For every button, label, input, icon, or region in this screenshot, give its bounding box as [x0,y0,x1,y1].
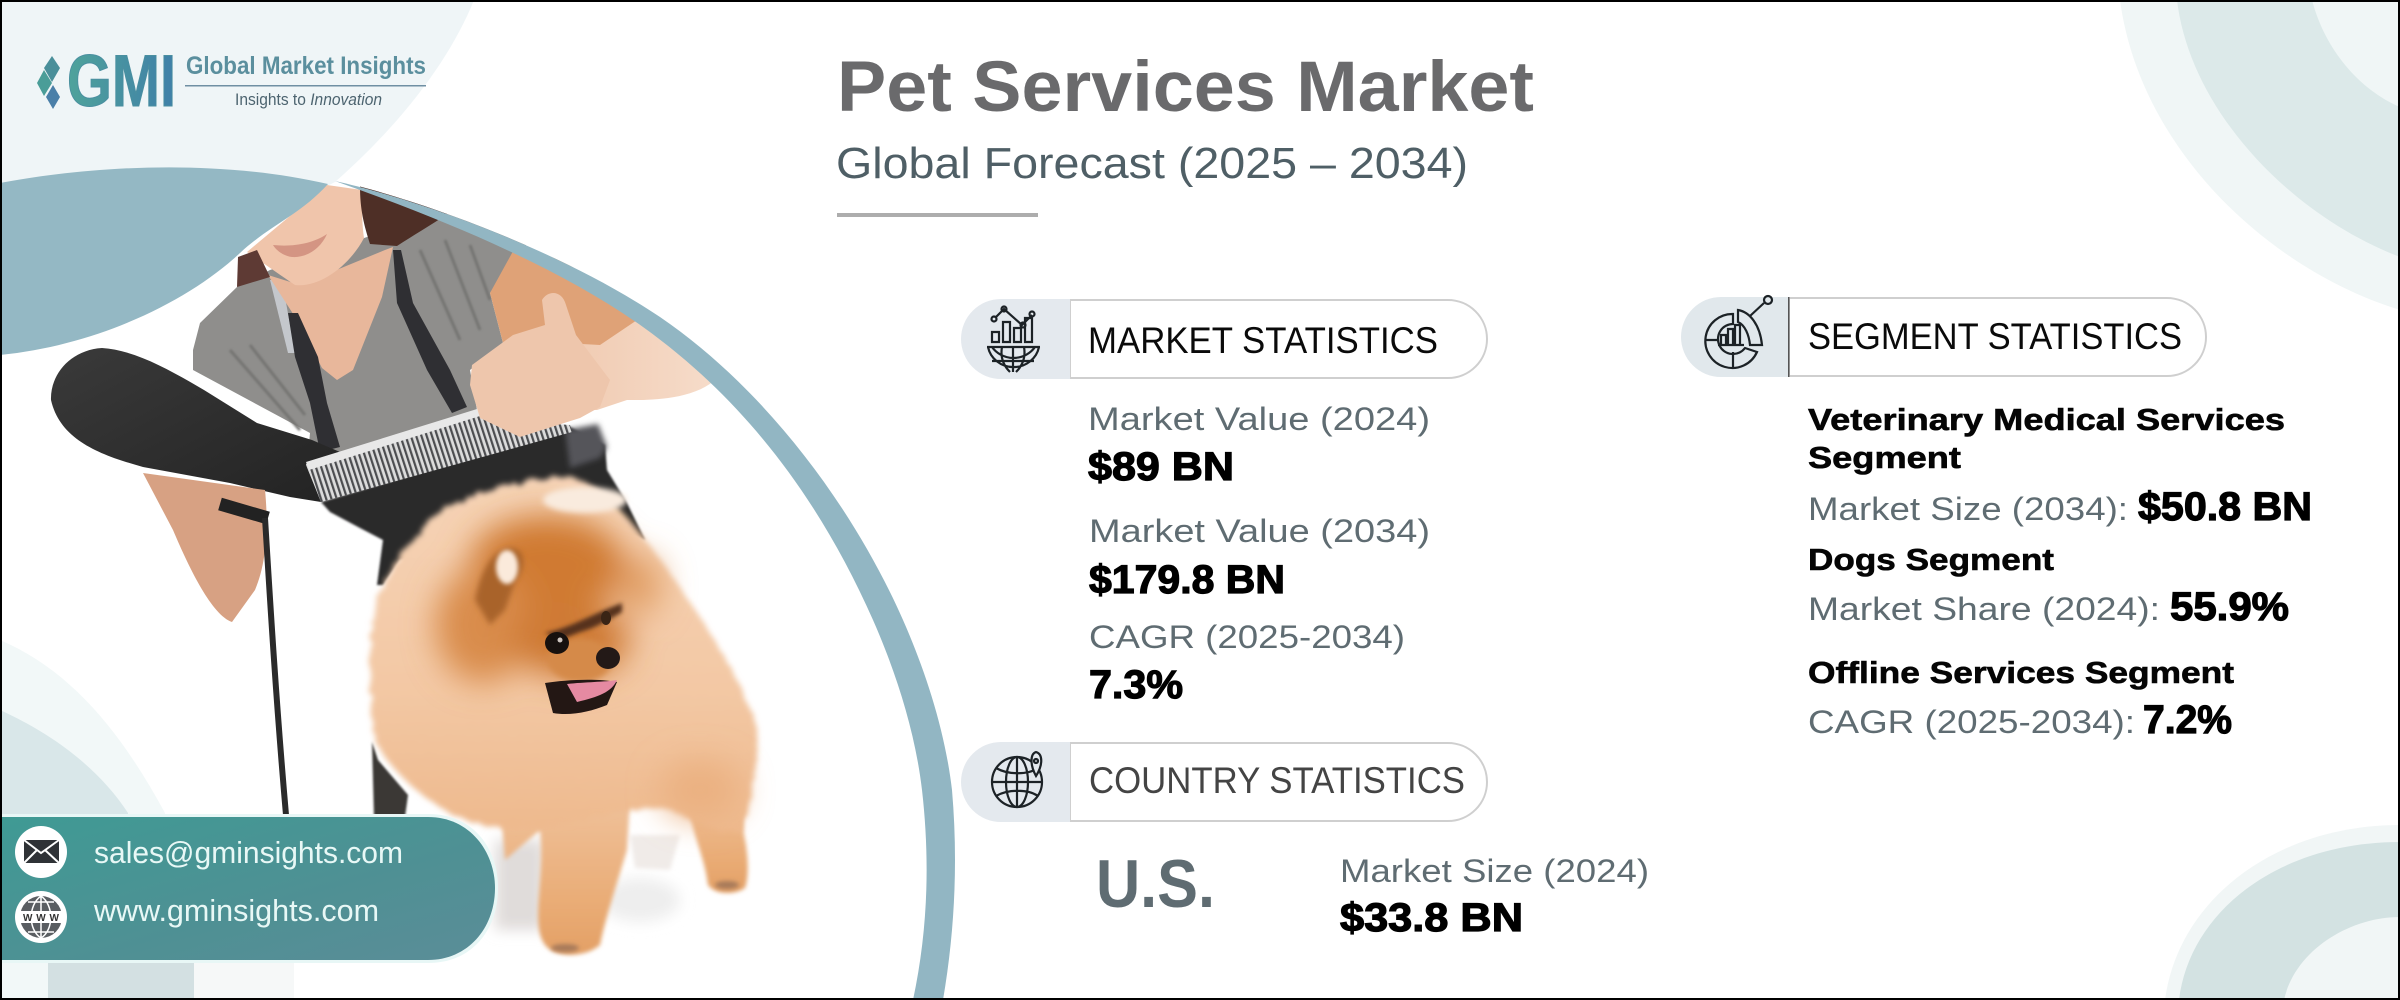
groomer shirt [193,205,530,465]
dogs segment: Dogs Segment [1808,542,2054,577]
contact panel background [0,814,498,963]
groomer neck and chest [268,247,393,380]
country market size [1340,853,1649,940]
country name: U.S. [1096,846,1215,922]
grey shirt hem behind hand [565,424,607,468]
panel: segment statistics [1681,296,2312,742]
offline services segment [1808,655,2234,742]
dog muzzle [548,638,612,682]
offline services segment: CAGR (2025-2034): [1808,704,2135,740]
dog [370,477,758,955]
background: bottom right ring [2165,825,2400,1000]
dogs segment: 55.9% [2170,585,2289,629]
market value 2034 [1089,513,1430,602]
icon: segment donut chart [1705,296,1772,368]
country market size: $33.8 BN [1340,896,1523,940]
email address: sales@gminsights.com [94,835,403,870]
market value 2034: Market Value (2034) [1089,513,1430,549]
dog silhouette [370,477,758,831]
icon: chart on globe [987,306,1040,372]
website address: www.gminsights.com [93,893,379,928]
logo letters: GMI [67,41,176,122]
country market size: Market Size (2024) [1340,853,1649,889]
teal blob over photo [0,167,328,355]
dryer cord [220,504,286,815]
dog brow [545,603,622,640]
icon: www globe: WWW [23,913,60,924]
veterinary medical services segment [1808,402,2312,529]
dark fur at back of dog [372,742,408,817]
groomer face [247,185,364,285]
contact panel [0,814,498,963]
dog tongue [567,680,617,702]
dog ear [475,548,523,625]
icon: envelope [15,826,67,878]
groomer lower arm [143,473,267,622]
logo diamonds [37,56,60,109]
market statistics header pill [961,299,1487,379]
icon: www globe [15,891,67,943]
market statistics heading: MARKET STATISTICS [1088,320,1438,361]
groomer hair [237,186,450,287]
offline services segment: 7.2% [2143,698,2232,742]
segment statistics header pill [1681,296,2206,377]
market value 2024: Market Value (2024) [1088,401,1430,437]
veterinary medical services segment: Market Size (2034): [1808,491,2128,527]
background: bottom left ring [0,640,294,1000]
cagr: CAGR (2025-2034) [1089,619,1405,655]
dogs segment: Market Share (2024): [1808,591,2160,627]
offline services segment: Offline Services Segment [1808,655,2234,690]
groomer mouth [273,234,327,257]
dog paws toes [551,881,739,952]
dog floor shadow [495,840,680,930]
panel: market statistics [961,299,1487,707]
title: Pet Services Market [837,48,1534,127]
country statistics heading: COUNTRY STATISTICS [1089,760,1465,801]
dog head white tuft [543,487,627,513]
panel: country statistics [961,742,1649,940]
dog eyes [545,611,611,654]
cagr [1089,619,1405,707]
dog nose [596,647,620,669]
logo tagline: Insights to Innovation [235,90,382,109]
dog dark back and black coat [321,427,645,585]
logo [37,41,426,122]
background: top left pale shape [0,0,474,200]
groomer forearm [510,318,715,410]
dog legs [500,790,748,955]
cagr: 7.3% [1089,663,1183,707]
groomer upper arm [490,244,660,352]
dog mouth [545,680,617,714]
market value 2034: $179.8 BN [1089,558,1285,602]
apron straps [288,250,467,452]
veterinary medical services segment: Segment [1808,440,1961,475]
dog orange fur patches [435,515,740,820]
veterinary medical services segment: Veterinary Medical Services [1808,402,2285,437]
background: top right ring [2120,0,2400,310]
photo: groomer with hair dryer and pomeranian [51,185,758,955]
dogs segment [1808,542,2289,629]
groomer collar [270,280,295,353]
subtitle: Global Forecast (2025 – 2034) [836,139,1468,188]
area above arc masked white [338,168,700,317]
title rule [837,213,1038,217]
market value 2024 [1088,401,1430,489]
segment statistics heading: SEGMENT STATISTICS [1808,316,2182,357]
groomer hand and fingers [470,293,610,437]
country statistics header pill [961,742,1487,822]
logo name: Global Market Insights [186,52,426,80]
veterinary medical services segment: $50.8 BN [2138,485,2312,529]
comb [306,409,572,502]
market value 2024: $89 BN [1088,445,1234,489]
hair dryer [51,348,340,502]
icon: globe with pin [992,752,1042,807]
teal arc around photo [335,181,955,1000]
